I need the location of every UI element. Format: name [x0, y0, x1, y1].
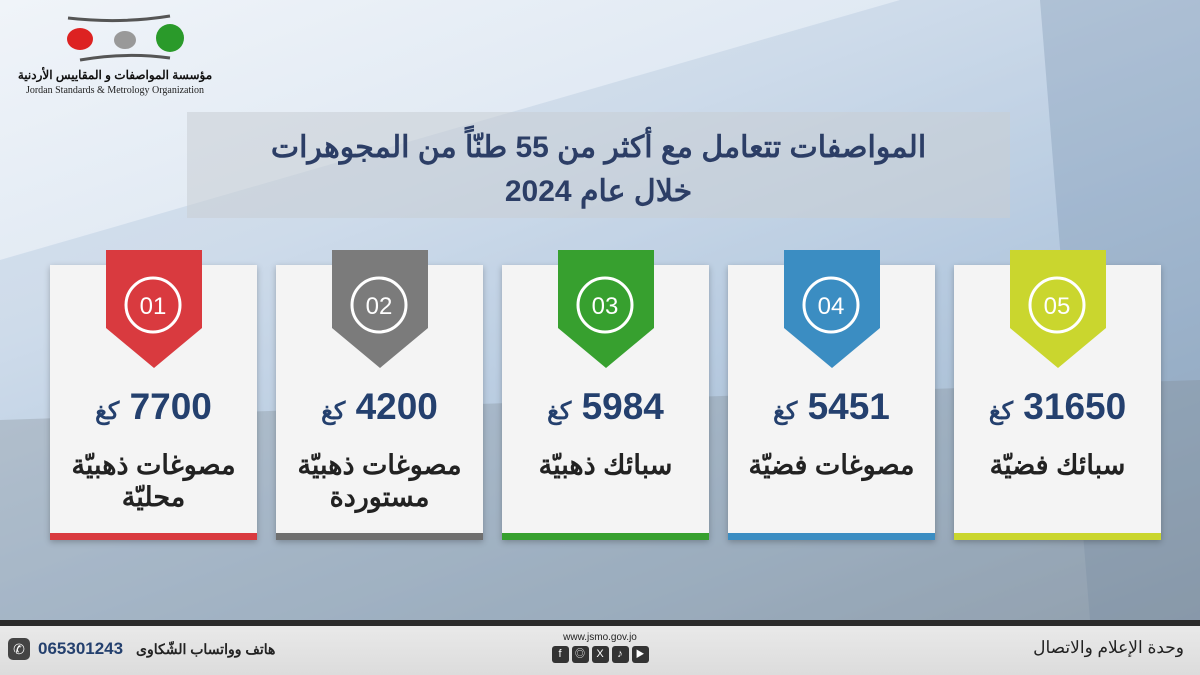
- ribbon 01: [106, 250, 202, 368]
- card 04: مصوغات فضيّة: [748, 450, 915, 480]
- logo: Jordan Standards & Metrology Organization: [26, 85, 204, 96]
- card 01: محليّة: [122, 482, 185, 512]
- website and social: www.jsmo.gov.jo: [563, 632, 637, 643]
- website and social: ♪: [617, 648, 623, 660]
- website and social: f: [558, 648, 562, 660]
- whatsapp icon: [8, 638, 30, 660]
- card 02: 4200 كغ: [321, 386, 438, 427]
- website and social: ▶: [635, 649, 644, 659]
- ribbon 02: [332, 250, 428, 368]
- title panel: خلال عام 2024: [505, 175, 692, 208]
- ribbon 02: 02: [366, 293, 392, 320]
- unit name: وحدة الإعلام والاتصال: [1033, 638, 1184, 657]
- card 02: [276, 265, 483, 540]
- ribbon 05: 05: [1044, 293, 1070, 320]
- card 05: 31650 كغ: [989, 386, 1126, 427]
- ribbon 03: [558, 250, 654, 368]
- website and social: [552, 632, 649, 663]
- card 04: [728, 265, 935, 540]
- footer: [0, 620, 1200, 675]
- logo: [18, 14, 212, 96]
- title panel: [187, 112, 1010, 218]
- card 01: [50, 265, 257, 540]
- ribbon 04: [784, 250, 880, 368]
- card 05: سبائك فضيّة: [990, 450, 1125, 480]
- ribbon 04: 04: [818, 293, 844, 320]
- card 01: 7700 كغ: [95, 386, 212, 427]
- card 01: مصوغات ذهبيّة: [71, 450, 236, 480]
- card 05: [954, 265, 1161, 540]
- card 03: [502, 265, 709, 540]
- ribbon 05: [1010, 250, 1106, 368]
- website and social: ◎: [575, 649, 585, 660]
- card 02: مستوردة: [330, 482, 429, 512]
- card 03: سبائك ذهبيّة: [539, 450, 672, 480]
- whatsapp icon: ✆: [13, 641, 25, 657]
- phone: 065301243: [38, 639, 123, 658]
- title panel: المواصفات تتعامل مع أكثر من 55 طنّاً من المجوهرات: [271, 131, 926, 164]
- card 02: مصوغات ذهبيّة: [297, 450, 462, 480]
- logo: مؤسسة المواصفات و المقاييس الأردنية: [18, 68, 212, 82]
- card 03: 5984 كغ: [547, 386, 664, 427]
- website and social: X: [596, 648, 604, 660]
- card 04: 5451 كغ: [773, 386, 890, 427]
- ribbon 03: 03: [592, 293, 618, 320]
- phone label: هاتف وواتساب الشّكاوى: [136, 641, 275, 657]
- ribbon 01: 01: [140, 293, 166, 320]
